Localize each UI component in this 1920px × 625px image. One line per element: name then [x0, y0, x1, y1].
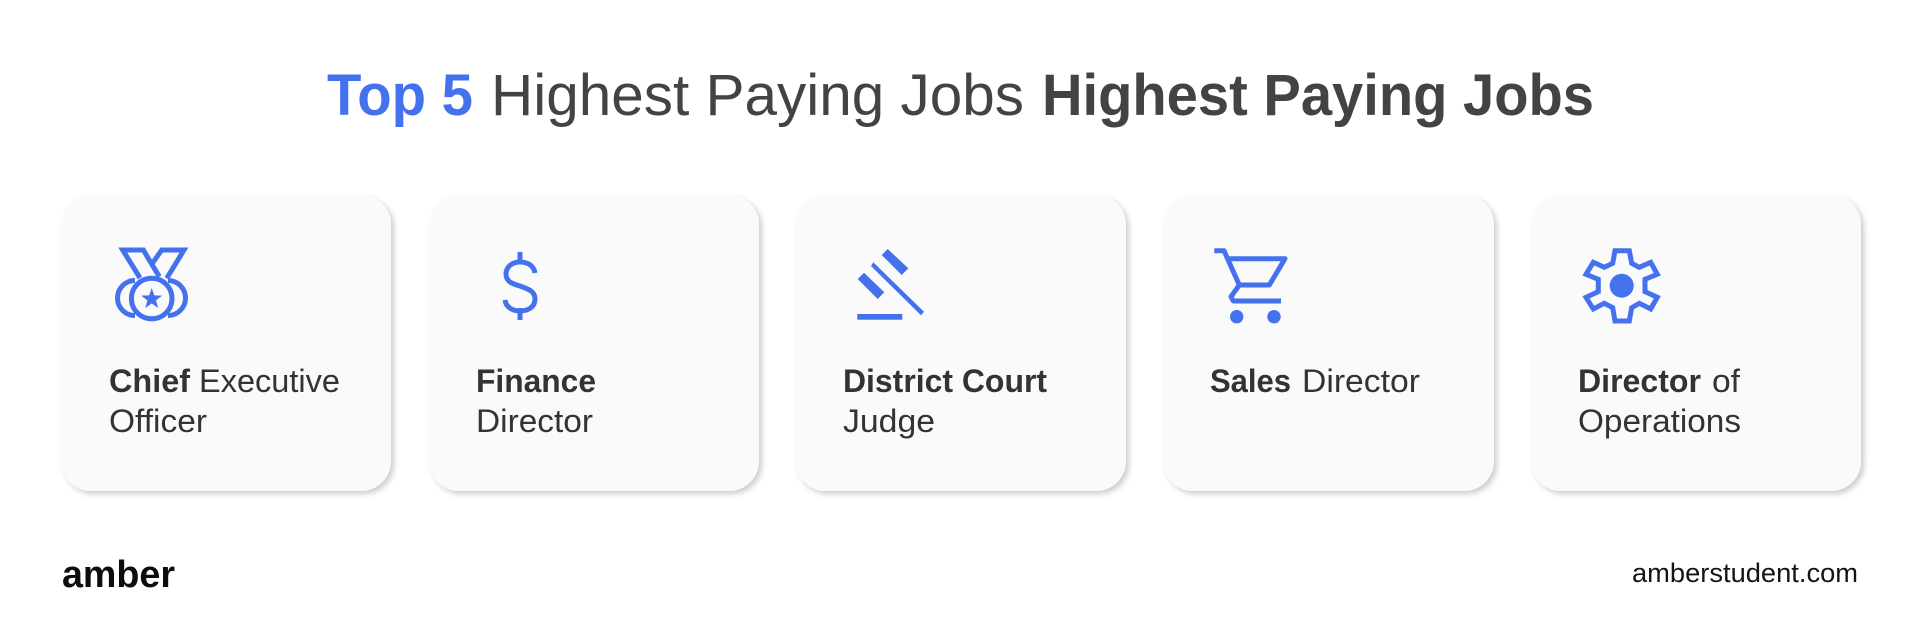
panel: Director of Operations	[1531, 195, 1861, 491]
label: Finance Director	[476, 363, 596, 439]
panel: District Court Judge	[796, 195, 1126, 491]
label: Chief Executive Officer: Officer	[109, 403, 207, 439]
label: Director of Operations: of	[1712, 363, 1740, 399]
icon: shopping cart	[1214, 251, 1285, 323]
label: Chief Executive Officer: Chief	[109, 363, 190, 399]
website: amberstudent.com: amberstudent.com	[1632, 558, 1858, 588]
icon: gear	[1586, 251, 1657, 321]
title	[327, 63, 1594, 128]
icon: gavel	[857, 249, 924, 320]
label: District Court Judge: District Court	[843, 363, 1047, 399]
label: Sales Director: Sales	[1210, 363, 1291, 399]
label: District Court Judge	[843, 363, 1047, 439]
label: District Court Judge: Judge	[843, 403, 935, 439]
panel: Chief Executive Officer	[61, 195, 391, 491]
label: Director of Operations: Operations	[1578, 403, 1741, 439]
panel: Sales Director	[1163, 195, 1494, 491]
title: Highest Paying Jobs	[491, 63, 1024, 128]
label: Chief Executive Officer	[109, 363, 340, 439]
icon: medal	[118, 250, 186, 319]
label: Director of Operations: Director	[1578, 363, 1701, 399]
label: Finance Director: Director	[476, 403, 593, 439]
label: Director of Operations	[1578, 363, 1741, 439]
title: Top 5	[327, 63, 473, 128]
label: Chief Executive Officer: Executive	[199, 363, 340, 399]
logo: amber: amber	[62, 554, 175, 596]
title: Highest Paying Jobs	[1042, 63, 1594, 128]
panel: Finance Director	[429, 195, 759, 491]
label: Sales Director: Director	[1302, 363, 1420, 399]
label: Finance Director: Finance	[476, 363, 596, 399]
label: Sales Director	[1210, 363, 1420, 399]
icon: dollar sign	[505, 252, 535, 320]
